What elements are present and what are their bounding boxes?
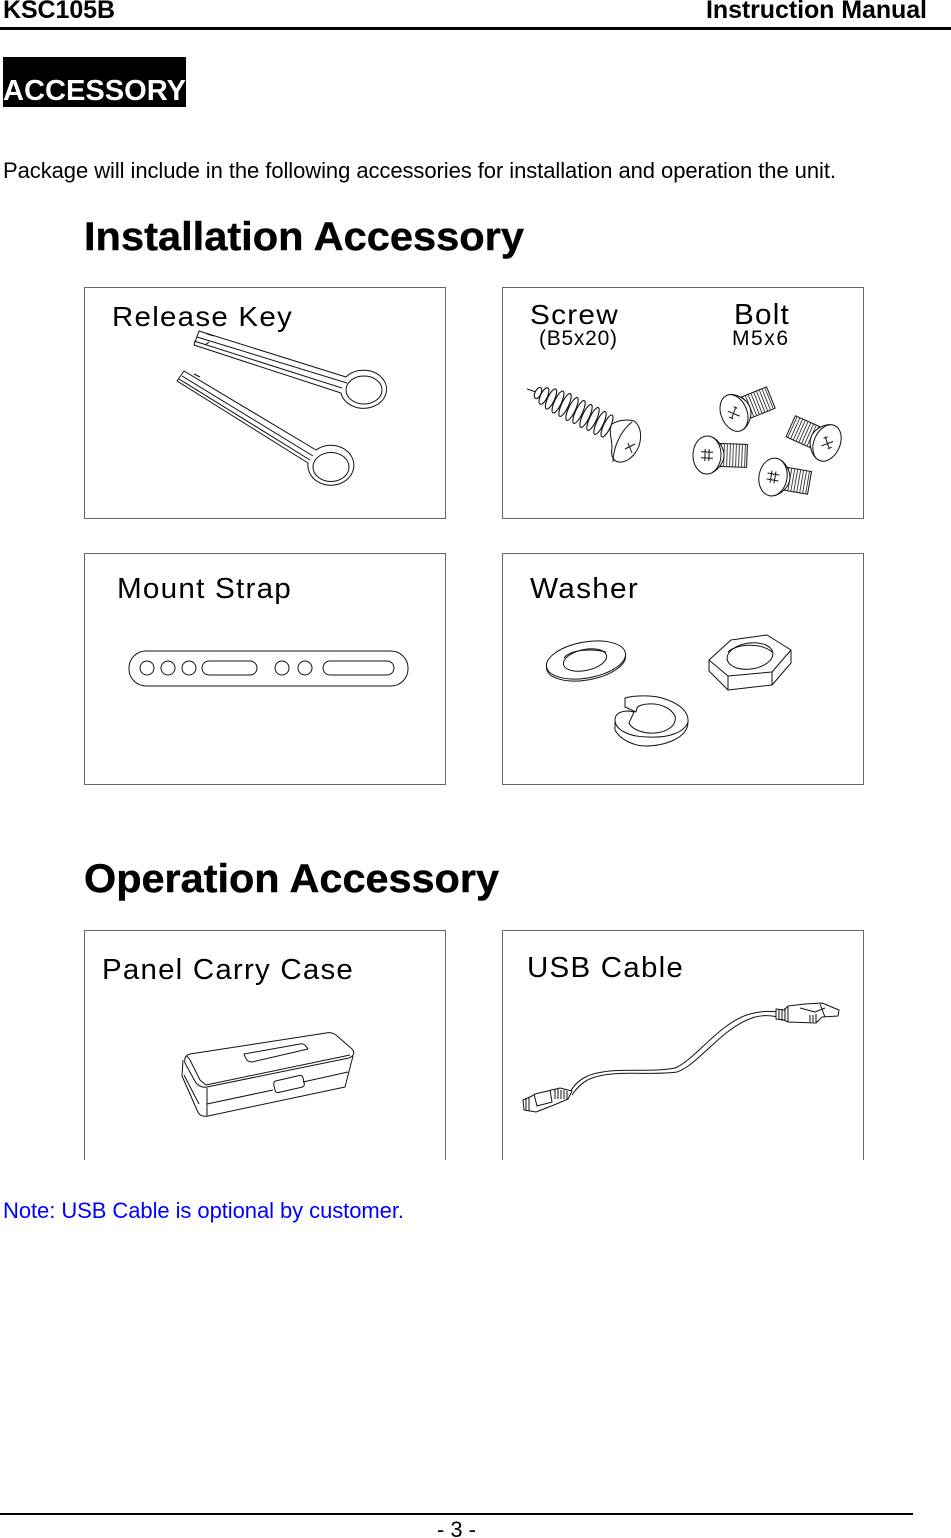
bolt 2 [783,409,847,466]
label: bolt size: M5x6 [732,327,788,350]
bolt 3 [692,436,748,475]
panel: panel carry case [84,930,446,1160]
panel: release key [84,288,446,518]
label: mount strap: Mount Strap [117,573,292,605]
bolt 4 [756,456,813,502]
bolt 1 [715,380,778,435]
label: screw size: (B5x20) [539,327,617,350]
icon: flat washer [543,635,629,687]
section heading: accessory: ACCESSORY [3,75,186,107]
intro text: Package will include in the following accessories for installation and operation the unit. [3,158,836,183]
panel: screw and bolt [502,288,864,518]
icon: strap [129,651,408,686]
label: panel carry case: Panel Carry Case [102,954,354,986]
label: release key: Release Key [112,301,293,332]
icon: bolts [692,380,847,502]
icon: hex nut [709,635,791,690]
label: washer: Washer [530,573,639,605]
heading: installation accessory: Installation Accessory [84,215,525,259]
label: bolt: Bolt [734,299,790,331]
icon: usb cable [523,1003,839,1112]
icon: screw [527,386,641,462]
heading: operation accessory: Operation Accessory [84,857,500,901]
label: screw: Screw [530,299,619,330]
icon: upper release key [194,331,387,408]
icon: lower release key [177,371,354,485]
panel: usb cable [502,930,864,1160]
label: usb cable: USB Cable [527,952,684,984]
icon: spring washer [615,696,688,746]
section heading: accessory [3,57,186,107]
note: Note: USB Cable is optional by customer. [3,1198,404,1223]
panel: mount strap [84,554,446,784]
panel: washer [502,554,864,784]
page header [0,0,951,30]
icon: carry case [182,1033,354,1116]
